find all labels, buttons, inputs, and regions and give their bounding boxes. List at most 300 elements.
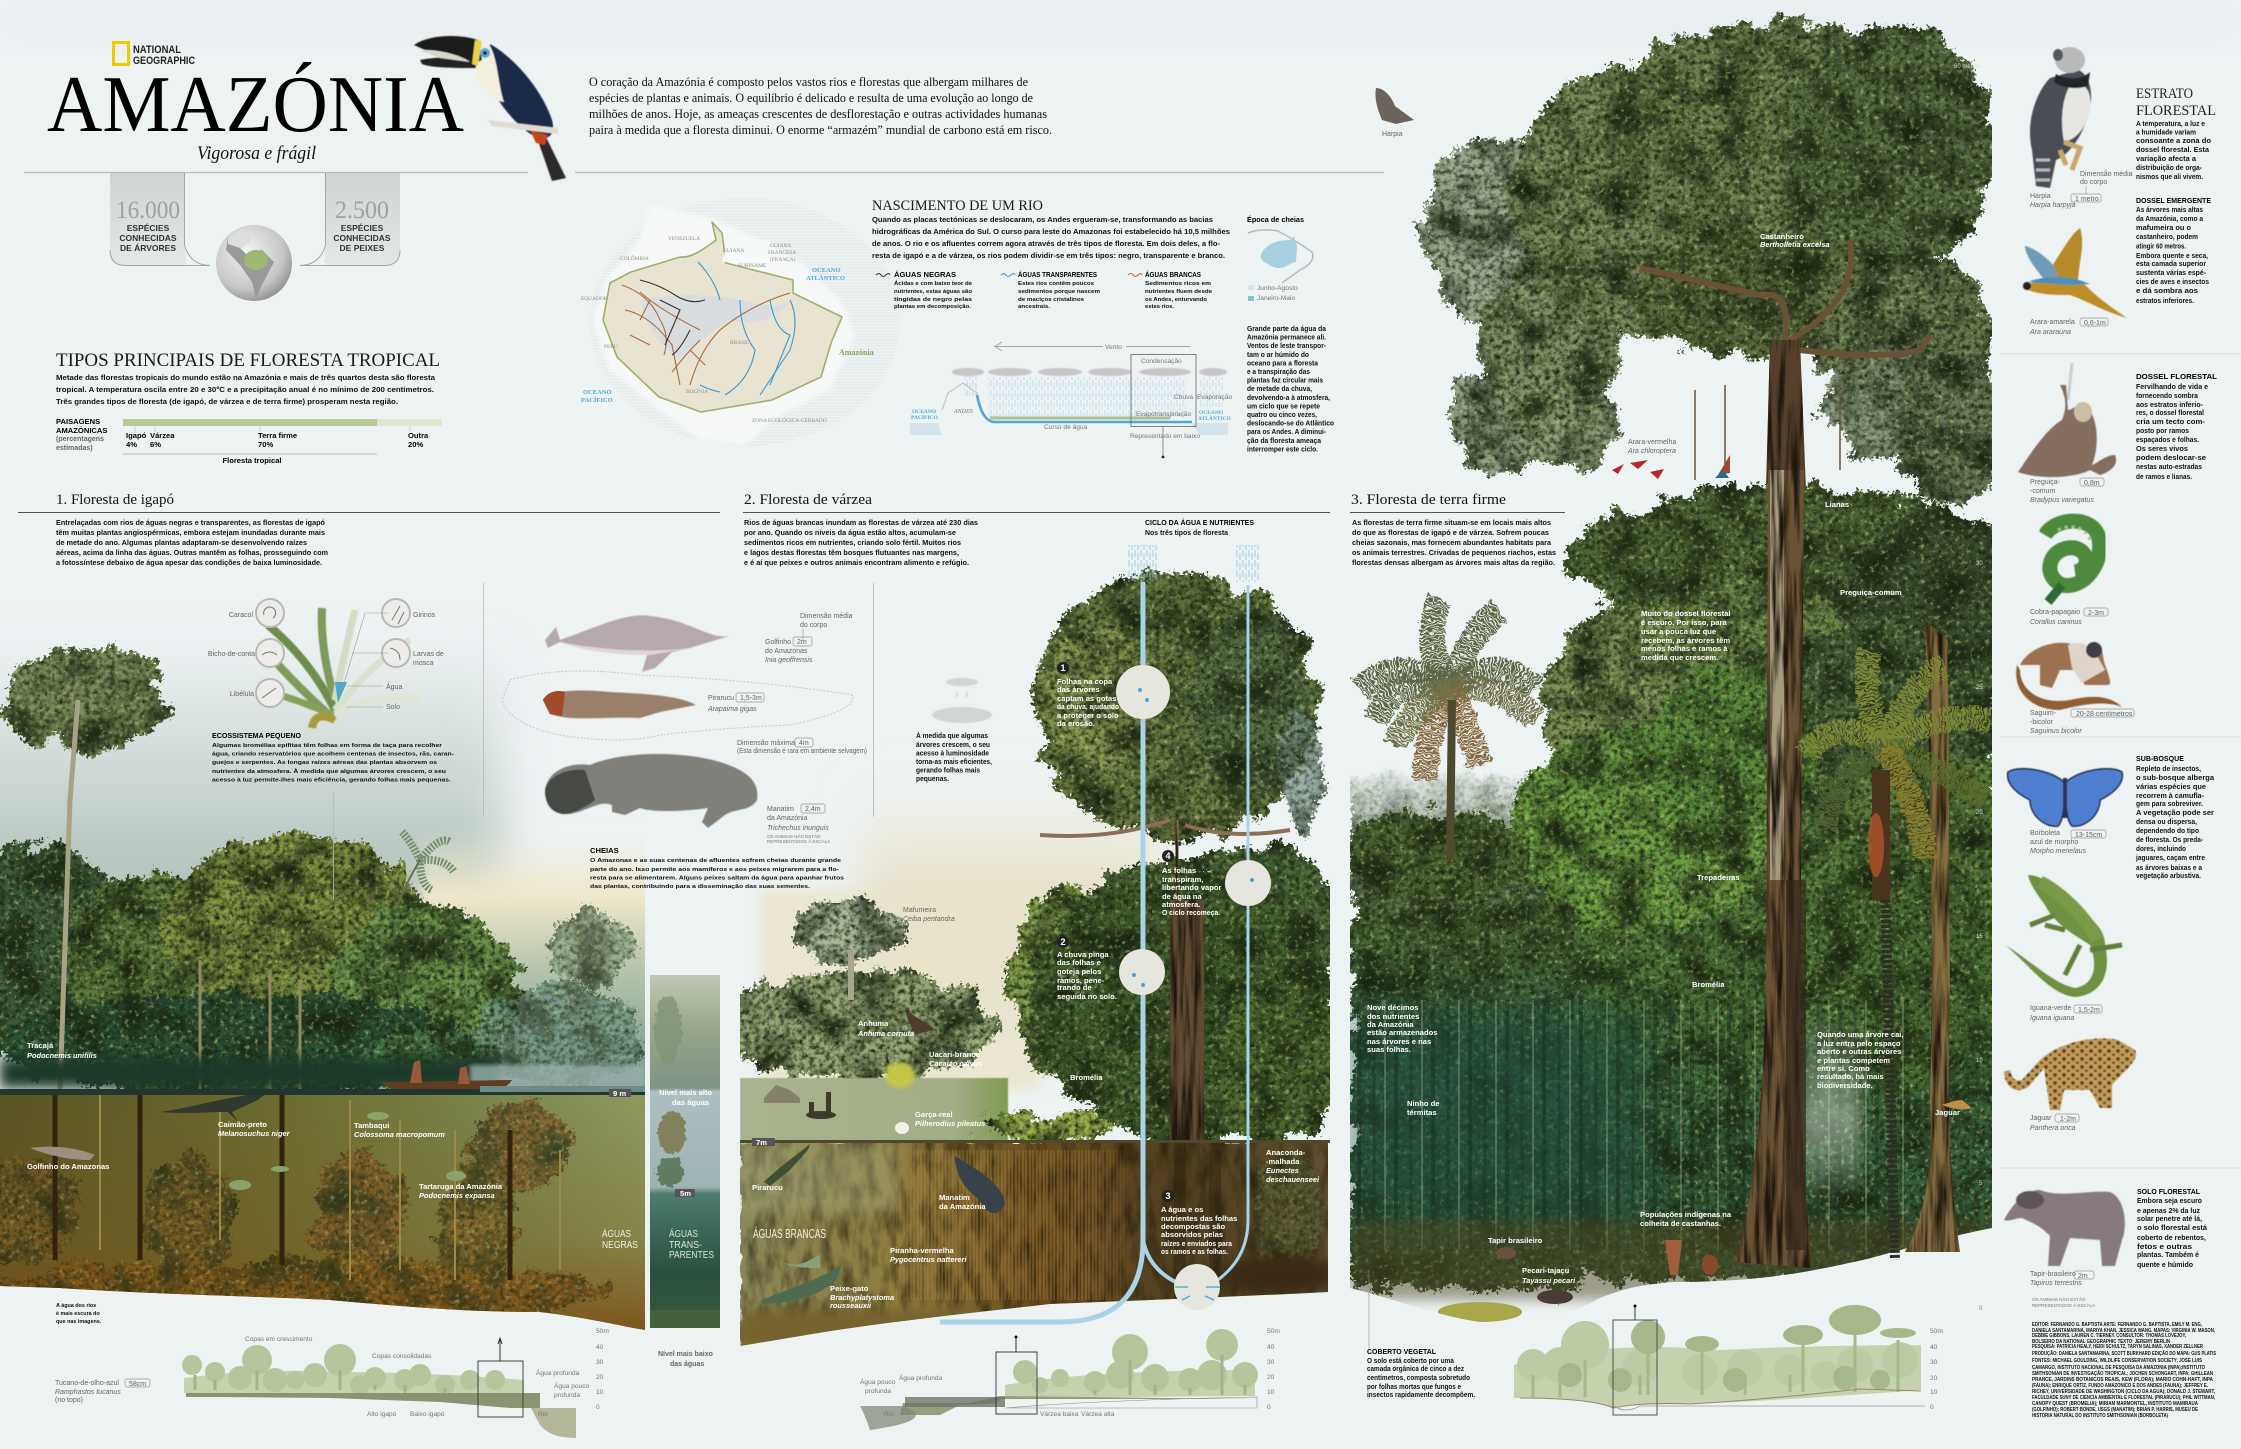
chart: várzea forest profile: 50m — [1267, 1328, 1280, 1335]
labels: terra firme annotations: menos folhas e ramos à — [1641, 644, 1728, 653]
text: emergent canopy: estratos inferiores. — [2136, 296, 2194, 305]
bar chart: landscapes: Outra — [408, 431, 429, 440]
icon: heron — [895, 1122, 909, 1134]
text: terra firme intro: do que as florestas de igapó e de várzea. Sofrem poucas — [1352, 528, 1549, 537]
label: macaw: Arara-amarela — [2030, 319, 2075, 326]
labels: aquatic species sizes: Arapaima gigas — [707, 706, 757, 713]
labels: aquatic species sizes: da Amazónia — [767, 815, 808, 822]
flood season inset map — [1247, 215, 1313, 302]
text: emergent canopy: castanheiro, podem — [2136, 232, 2198, 241]
main trunk — [1735, 470, 1812, 1268]
height scale: terra firme: 30 — [1976, 561, 1983, 567]
icon: flying bird — [905, 1010, 935, 1034]
bar chart: landscapes: 4% — [126, 440, 137, 449]
labels: igapó species: PARENTES — [669, 1250, 714, 1261]
diagram: atmospheric water cycle: Vento — [1105, 344, 1122, 351]
text: cycle step 4: As folhas — [1162, 866, 1196, 875]
chart: várzea forest profile: 30 — [1267, 1359, 1275, 1366]
label: tamarin — [2030, 709, 2134, 735]
text: cycle step 4: O ciclo recomeça. — [1162, 908, 1220, 917]
diagram: atmospheric water cycle: Evapotranspiração — [1136, 411, 1191, 418]
chart: igapó forest profile: 40 — [596, 1344, 604, 1351]
panel: nascimento de um rio: hidrográficas da América do Sul. O curso para leste do Amazonas foi estabelecido há 10,5 milhões — [872, 227, 1230, 236]
text: forest canopy: Os seres vivos — [2136, 444, 2188, 453]
labels: igapó species: ÁGUAS — [669, 1227, 698, 1240]
labels: terra firme annotations: Preguiça-comum — [1840, 588, 1902, 597]
labels: igapó species: Tracajá — [27, 1041, 54, 1050]
labels: terra firme annotations: recebem, as árvores têm — [1641, 636, 1730, 645]
text: understory: o sub-bosque alberga — [2136, 773, 2215, 782]
height scale: terra firme: 45 — [1976, 188, 1983, 194]
labels: igapó species: Podocnemis expansa — [419, 1191, 495, 1200]
text: small ecosystem — [212, 731, 454, 783]
chart: várzea forest profile: 40 — [1267, 1344, 1275, 1351]
label: tapir: Tapir-brasileiro — [2030, 1271, 2076, 1278]
text: floods: O Amazonas e as suas centenas de afluentes sofrem cheias durante grande — [590, 858, 841, 864]
text: leaf size note: torna-as mais eficientes, — [916, 757, 992, 766]
label: sloth: 0,8m — [2084, 480, 2100, 487]
label: toucan species — [55, 1379, 150, 1404]
map: Amazon basin: GUIANA — [723, 248, 744, 254]
map: Amazon basin: ATLÂNTICO — [806, 274, 845, 282]
label: tapir: OS ANIMAIS NÃO ESTÃO — [2032, 1296, 2086, 1302]
label: snake: 2-3m — [2088, 610, 2104, 617]
label: sloth: Preguiça- — [2030, 479, 2061, 486]
stat: fish: ESPÉCIES — [341, 223, 384, 233]
labels: terra firme annotations: dos nutrientes — [1367, 1012, 1419, 1021]
labels: igapó species: das águas — [670, 1361, 704, 1368]
text: emergent canopy: e dá sombra aos — [2136, 286, 2198, 295]
labels: terra firme annotations: nas árvores e nas — [1367, 1037, 1431, 1046]
text: understory: Repleto de insectos, — [2136, 764, 2201, 773]
stat: tree and fish species with globe — [110, 173, 400, 301]
text: cycle step 3: raízes e enviados para — [1161, 1239, 1233, 1248]
map: Amazon basin: ZONA ECOLÓGICA-CERRADO — [752, 416, 827, 424]
icon: bromeliad with circles: Girinos — [413, 612, 436, 619]
text: water recycling: Amazónia permanece ali. — [1247, 333, 1326, 342]
text: terra firme intro: os animais terrestres. Crivadas de pequenos riachos, estas — [1352, 548, 1556, 557]
labels: igapó species: 9 m — [613, 1089, 626, 1098]
icon: tapir — [2004, 1190, 2125, 1266]
icon: river dolphin — [545, 615, 729, 672]
chart: terra firme forest profile: 0 — [1930, 1404, 1934, 1411]
chart: igapó forest profile: 30 — [596, 1359, 604, 1366]
chart: igapó forest profile: Rio — [538, 1411, 548, 1418]
text: ground cover: centímetros, composta sobretudo — [1367, 1373, 1470, 1382]
stat: trees — [116, 197, 180, 253]
legend: white waters: os Andes, enturvando — [1145, 297, 1208, 303]
label: toucan species: 58cm — [129, 1381, 146, 1388]
labels: várzea species: Anaconda- — [1266, 1148, 1306, 1157]
text: forest floor: SOLO FLORESTAL — [2137, 1187, 2200, 1196]
legend: white waters: ÁGUAS BRANCAS — [1145, 270, 1201, 279]
icon: bromeliad with circles: Libélula — [230, 691, 254, 698]
text: understory: vegetação arbustiva. — [2136, 871, 2201, 880]
icon: bromeliad with circles: Solo — [386, 704, 400, 711]
legend: clear waters: ancestrais. — [1018, 304, 1051, 310]
label: iguana: Iguana iguana — [2030, 1015, 2074, 1022]
labels: aquatic species sizes: Dimensão máxima — [737, 740, 795, 747]
labels: igapó species: Nível mais baixo — [658, 1351, 713, 1358]
chart: várzea forest profile: profunda — [865, 1388, 891, 1395]
label: harpy — [2030, 171, 2133, 209]
panel: nascimento de um rio: resta de igapó e a de várzea, os rios podem dividir-se em três tipos: negro, transparente e branco. — [872, 251, 1225, 260]
legend: clear waters — [1001, 270, 1100, 310]
labels: terra firme annotations: Bertholletia excelsa — [1760, 240, 1829, 249]
text: cycle step 2: trando de — [1057, 983, 1092, 992]
panel: várzea forest scene — [720, 570, 1340, 1145]
labels: terra firme annotations: térmitas — [1407, 1108, 1437, 1117]
labels: terra firme annotations: Bromélia — [1692, 980, 1725, 989]
legend: white waters: Sedimentos ricos em — [1145, 281, 1211, 287]
labels: terra firme annotations: da Amazónia — [1367, 1020, 1414, 1029]
labels: terra firme annotations: Ara chloroptera — [1627, 448, 1676, 455]
text: small ecosystem: guejos e serpentes. As longas raízes aéreas das plantas absorvem os — [212, 760, 437, 766]
icon: blue-and-yellow macaw — [2022, 228, 2127, 318]
labels: igapó species: ÁGUAS — [602, 1227, 631, 1240]
height scale: terra firme: 5 — [1979, 1181, 1983, 1187]
chart: várzea forest profile: Água pouco — [860, 1377, 896, 1386]
labels: várzea species: Garça-real — [915, 1110, 953, 1119]
text: water recycling: um ciclo que se repete — [1247, 401, 1320, 410]
icon: blue morpho butterfly — [2008, 769, 2122, 826]
chart: terra firme forest profile — [1514, 1304, 1943, 1415]
text: water recycling: Grande parte da água da — [1247, 324, 1327, 333]
icon: boat with fishermen — [806, 1092, 836, 1119]
map: Amazon basin: SURINAME — [738, 263, 767, 269]
labels: aquatic species sizes: (Esta dimensão é rara em ambiente selvagem) — [737, 748, 867, 755]
label: butterfly: Borboleta — [2030, 830, 2060, 837]
text: várzea intro: e é aí que peixes e outros animais encontram alimento e refúgio. — [744, 558, 969, 567]
bar chart: landscapes: AMAZÓNICAS — [56, 426, 107, 435]
label: iguana: Iguana-verde — [2030, 1005, 2071, 1012]
height scale: terra firme: 20 — [1976, 810, 1983, 816]
title: AMAZÓNIA — [47, 61, 464, 149]
text: cycle step 2: A chuva pinga — [1057, 950, 1109, 959]
label: tapir: Tapirus terrestris — [2030, 1280, 2082, 1287]
text: terra firme intro: As florestas de terra firme situam-se em locais mais altos — [1352, 518, 1551, 527]
text: forest floor: quente e húmido — [2137, 1260, 2193, 1269]
labels: terra firme annotations: resultado, há mais — [1817, 1072, 1884, 1081]
legend: white waters: nutrientes fluem desde — [1145, 289, 1212, 295]
cycle steps: number badges: 3 — [1165, 1191, 1171, 1201]
flood season inset map: Época de cheias — [1247, 215, 1304, 224]
labels: igapó species: é mais escura do — [56, 1311, 100, 1317]
panel: tipos principais: tropical. A temperatura oscila entre 20 e 30ºC e a precipitação anual é no mínimo de 200 centímetros. — [56, 385, 434, 394]
labels: aquatic species sizes: do corpo — [800, 622, 827, 629]
intro paragraph: paira à medida que a floresta diminui. O enorme “armazém” mundial de carbono está em risco. — [589, 123, 1052, 137]
text: cycle step 1: captam as gotas — [1057, 694, 1117, 703]
labels: aquatic species sizes — [707, 613, 867, 844]
map: Amazon basin: BOLÍVIA — [686, 387, 708, 395]
intro paragraph: espécies de plantas e animais. O equilíbrio é delicado e resulta de uma evolução ao longo de — [589, 91, 1034, 105]
text: igapó intro: aéreas, acima da linha das águas. Outras mantêm as folhas, prosseguindo com — [56, 548, 328, 557]
text: forest floor: fetos e outras — [2137, 1242, 2192, 1251]
icon: bromeliad with circles: Água — [386, 682, 402, 691]
labels: terra firme annotations: Ninho de — [1407, 1099, 1439, 1108]
chart: terra firme forest profile: 30 — [1930, 1359, 1938, 1366]
labels: várzea species: Pygocentrus nattereri — [890, 1255, 967, 1264]
text: terra firme intro: cheias sazonais, mas fornecem abundantes habitats para — [1352, 538, 1552, 547]
panel: transparent water column — [650, 975, 720, 1328]
text: water recycling: Ventos de leste transpor- — [1247, 341, 1326, 350]
bar chart: landscapes: 70% — [258, 440, 273, 449]
header: National Geographic logo: GEOGRAPHIC — [133, 55, 195, 67]
text: forest canopy: espaçados e folhas. — [2136, 435, 2199, 444]
label: tapir: REPRESENTADOS À ESCALA — [2032, 1302, 2095, 1308]
text: credits: EDITOR: FERNANDO G. BAPTISTA ARTE: FERNANDO G. BAPTISTA, EMILY M. ENG, — [2032, 1322, 2202, 1328]
height scale: terra firme: 60 metros — [1954, 64, 1981, 70]
chart: terra firme forest profile: 40 — [1930, 1344, 1938, 1351]
text: emergent canopy — [2136, 196, 2211, 305]
text: forest floor: coberto de rebentos, — [2137, 1233, 2206, 1242]
text: forest canopy: cria um tecto com- — [2136, 417, 2205, 426]
height scale: terra firme: 0 — [1979, 1306, 1983, 1312]
text: cycle step 1: da chuva, ajudando — [1057, 702, 1119, 711]
labels: várzea species: Eunectes — [1266, 1166, 1299, 1175]
height scale: terra firme: 40 — [1976, 313, 1983, 319]
chart: igapó forest profile: 0 — [596, 1404, 600, 1411]
height scale: terra firme: 25 — [1976, 685, 1983, 691]
labels: várzea species: rousseauxii — [830, 1301, 872, 1310]
labels: igapó species: NEGRAS — [602, 1240, 638, 1251]
bar chart: landscapes: 20% — [408, 440, 423, 449]
labels: terra firme annotations: suas folhas. — [1367, 1045, 1411, 1054]
panel: nascimento de um rio: Quando as placas tectónicas se deslocaram, os Andes ergueram-se, transformando as bacias — [872, 215, 1213, 224]
chart: igapó forest profile: Copas consolidadas — [372, 1353, 432, 1360]
map: Amazon basin: Amazónia — [839, 348, 874, 357]
text: water and nutrients cycle heading — [1145, 518, 1254, 537]
height scale: terra firme — [1954, 64, 1983, 1312]
text: forest canopy: DOSSEL FLORESTAL — [2136, 372, 2217, 381]
map: Amazon basin: OCEANO — [583, 389, 612, 396]
icon: green iguana — [2005, 875, 2122, 997]
icon: harpy eagle — [2030, 47, 2091, 188]
labels: várzea species: Bromélia — [1070, 1073, 1103, 1082]
chart: várzea forest profile: 10 — [1267, 1389, 1275, 1396]
labels: terra firme annotations: medida que crescem. — [1641, 653, 1718, 662]
icon: bromeliad with circles: Larvas de — [413, 651, 444, 658]
flood season inset map: Janeiro-Maio — [1257, 295, 1295, 302]
icon: canoe with paddlers — [382, 1060, 512, 1092]
terra firme palm right — [1805, 650, 1990, 860]
labels: várzea species: da Amazónia — [939, 1202, 986, 1211]
labels: aquatic species sizes: 2,4m — [805, 806, 821, 813]
map: Amazon basin: VENEZUELA — [668, 236, 700, 242]
text: várzea intro — [744, 518, 978, 567]
labels: terra firme annotations: Arara-vermelha — [1628, 439, 1676, 446]
text: cycle step 3: A água e os — [1161, 1205, 1203, 1214]
labels: terra firme annotations: Tapir brasileiro — [1488, 1236, 1543, 1245]
labels: várzea species: 7m — [756, 1138, 767, 1147]
bar chart: landscapes: Floresta tropical — [222, 456, 282, 465]
text: forest floor: solar penetre até lá, — [2137, 1214, 2202, 1223]
text: ground cover: COBERTO VEGETAL — [1367, 1347, 1436, 1356]
icon: bromeliad with circles: Bicho-de-conta — [208, 651, 255, 658]
heading: forest strata: A temperatura, a luz e — [2136, 119, 2205, 128]
text: cycle step 2: seguida no solo. — [1057, 992, 1117, 1001]
text: igapó intro — [56, 518, 328, 567]
right trunks — [1905, 620, 1960, 1252]
flood season inset map: Junho-Agosto — [1257, 285, 1298, 292]
icon: manatee — [955, 1156, 1005, 1213]
bar chart: landscapes — [56, 417, 442, 465]
chart: igapó forest profile: Água pouco — [554, 1381, 590, 1390]
labels: aquatic species sizes: Manatim — [767, 806, 794, 813]
labels: terra firme annotations: Jaguar — [1935, 1108, 1960, 1117]
chart: várzea forest profile: Água profunda — [899, 1373, 943, 1382]
text: water recycling: devolvendo-a à atmosfera, — [1247, 393, 1330, 402]
labels: aquatic species sizes: do Amazonas — [765, 648, 808, 655]
terra firme palm left — [1360, 600, 1535, 780]
icon: sloth — [2018, 363, 2116, 477]
text: terra firme intro: florestas densas albergam as árvores mais altas da região. — [1352, 558, 1555, 567]
chart: igapó forest profile: profunda — [554, 1392, 580, 1399]
chart: várzea forest profile: 0 — [1267, 1404, 1271, 1411]
text: forest canopy — [2136, 372, 2217, 481]
cycle steps: number badges — [1057, 662, 1174, 1202]
label: sloth — [2030, 478, 2104, 504]
chart: várzea forest profile: Várzea alta — [1081, 1411, 1115, 1418]
labels: igapó species: que nas imagens. — [56, 1319, 102, 1325]
icon: leaf size silhouettes — [932, 678, 992, 723]
panel: igapó forest scene — [0, 640, 680, 1100]
text: cycle step 1: a proteger o solo — [1057, 711, 1119, 720]
text: leaf size note: acesso à luminosidade — [916, 748, 989, 758]
labels: aquatic species sizes: 2m — [797, 639, 807, 646]
labels: várzea species: Mafumeira — [903, 907, 936, 914]
icon: dragonfly — [256, 679, 284, 707]
text: water recycling: plantas faz circular mais — [1247, 376, 1323, 385]
heading: forest strata: consoante a zona do — [2136, 136, 2211, 145]
text: emergent canopy: cies de aves e insectos — [2136, 277, 2209, 286]
label: sloth: -comum — [2030, 488, 2055, 495]
icon: pill bug — [256, 639, 284, 667]
labels: igapó species: das águas — [672, 1098, 709, 1107]
text: understory: as árvores baixas e a — [2136, 863, 2203, 872]
icon: bromeliad with circles — [208, 599, 444, 728]
label: harpy: Harpia harpyja — [2030, 202, 2076, 209]
text: cycle step 1: da erosão. — [1057, 719, 1095, 728]
labels: várzea species: Pirarucu — [752, 1183, 783, 1192]
stat: trees: CONHECIDAS — [119, 233, 177, 243]
text: small ecosystem: água, criando reservatórios que acolhem centenas de insectos, rãs, caran- — [212, 752, 454, 758]
labels: aquatic species sizes: OS ANIMAIS NÃO ESTÃO — [767, 833, 821, 839]
bar chart: landscapes: PAISAGENS — [56, 417, 100, 426]
label: snake: Corallus caninus — [2030, 619, 2082, 626]
labels: terra firme annotations: Lianas — [1825, 500, 1849, 509]
label: toucan species: Ramphastos tucanus — [55, 1389, 121, 1396]
text: forest canopy: fornecendo sombra — [2136, 391, 2199, 400]
text: leaf size note: árvores crescem, o seu — [916, 740, 990, 749]
label: harpy: Harpia — [2030, 193, 2051, 200]
text: cycle step 2 — [1057, 950, 1117, 1001]
map: Amazon basin: COLÔMBIA — [620, 254, 649, 262]
text: leaf size note — [916, 731, 992, 783]
bar chart: landscapes: estimadas) — [56, 445, 93, 452]
text: credits — [2032, 1322, 2216, 1419]
icon: pied tamarin — [2016, 642, 2122, 710]
text: várzea intro: por ano. Quando os níveis da água estão altos, acumulam-se — [744, 528, 956, 537]
label: tapir: 2m — [2078, 1273, 2088, 1280]
text: understory: dores, incluindo — [2136, 844, 2186, 853]
label: toucan species: Tucano-de-olho-azul — [55, 1380, 119, 1387]
label: macaw: 0,6-1m — [2084, 320, 2106, 327]
icon: bromeliad with circles: Caracol — [229, 612, 253, 619]
labels: aquatic species sizes: Pirarucu — [708, 695, 734, 702]
text: ground cover: camada orgânica de cinco a dez — [1367, 1364, 1464, 1373]
text: floods: das plantas, contribuindo para a disseminação das suas sementes. — [590, 884, 811, 890]
header: National Geographic logo — [114, 42, 195, 67]
map: Amazon basin: PACÍFICO — [581, 396, 613, 404]
text: cycle step 4 — [1162, 866, 1222, 917]
labels: igapó species: 5m — [680, 1189, 691, 1198]
stat: fish: CONHECIDAS — [333, 233, 391, 243]
text: emergent canopy: sustenta várias espé- — [2136, 268, 2206, 277]
header rule — [24, 172, 1384, 174]
labels: terra firme annotations: Nove décimos — [1367, 1003, 1418, 1012]
stat: trees: 16.000 — [116, 197, 180, 224]
text: water recycling: para os Andes. A diminui- — [1247, 427, 1326, 436]
map: Amazon basin: (FRANÇA) — [770, 256, 796, 263]
text: forest floor — [2137, 1187, 2208, 1269]
heading: forest strata: dossel florestal. Esta — [2136, 145, 2210, 154]
text: water recycling: interromper este ciclo. — [1247, 444, 1318, 453]
labels: várzea species: Peixe-gato — [830, 1284, 869, 1293]
label: butterfly — [2030, 830, 2106, 855]
label: macaw — [2029, 318, 2108, 336]
text: forest canopy: de ramos e lianas. — [2136, 472, 2192, 481]
text: credits: FONTES: MICHAEL GOULDING, WILDLIFE CONSERVATION SOCIETY; JOSE LUIS — [2032, 1358, 2202, 1364]
chart: terra firme forest profile: 20 — [1930, 1375, 1938, 1382]
labels: terra firme annotations: é escuro. Por isso, para — [1641, 618, 1727, 627]
cycle steps: number badges: 4 — [1165, 851, 1171, 861]
legend: white waters: estes rios. — [1145, 304, 1175, 310]
height scale: terra firme: 10 — [1976, 1058, 1983, 1064]
text: forest floor: Embora seja escuro — [2137, 1196, 2202, 1205]
label: harpy: do corpo — [2080, 179, 2107, 186]
labels: várzea species: -malhada — [1266, 1157, 1300, 1166]
map: Amazon basin: PERU — [604, 344, 618, 350]
heading: forest strata: nismos que ali vivem. — [2136, 172, 2203, 181]
chart: várzea forest profile — [860, 1328, 1280, 1430]
map: Amazon basin: GUIANA — [770, 243, 791, 249]
text: cycle step 4: transpiram, — [1162, 875, 1203, 884]
labels: várzea species: deschauenseei — [1266, 1175, 1320, 1184]
text: forest canopy: Fervilhando de vida e — [2136, 382, 2208, 391]
chart: igapó forest profile: Copas em crescimento — [245, 1336, 313, 1343]
bar chart: landscapes: Igapó — [126, 431, 147, 440]
heading: forest strata: variação afecta a — [2136, 154, 2197, 163]
labels: aquatic species sizes: 1,5-3m — [740, 695, 762, 702]
legend: black waters — [876, 270, 973, 310]
text: cycle step 2: ramos, pene- — [1057, 976, 1105, 985]
labels: várzea species: Uacari-branco — [929, 1050, 980, 1059]
text: small ecosystem: ECOSSISTEMA PEQUENO — [212, 731, 301, 740]
lower forest mass — [1345, 488, 2020, 1322]
heading: forest strata — [2136, 86, 2216, 181]
text: understory: SUB-BOSQUE — [2136, 754, 2184, 763]
icon: small tree with yellow leaves — [885, 1062, 915, 1088]
text: emergent canopy: DOSSEL EMERGENTE — [2136, 196, 2211, 205]
legend: black waters: tingidas de negro pelas — [894, 297, 972, 303]
labels: várzea species: ÁGUAS BRANCAS — [753, 1226, 826, 1241]
text: credits: BOLSEIRO DA NATIONAL GEOGRAPHIC TEXTO: JEREMY BERLIN — [2032, 1339, 2170, 1345]
legend: white waters — [1128, 270, 1212, 310]
text: várzea intro: e lagos destas florestas têm bosques flutuantes nas margens, — [744, 548, 959, 557]
text: cycle step 1: Folhas na copa — [1057, 677, 1113, 686]
heading: forest strata: FLORESTAL — [2136, 103, 2216, 119]
